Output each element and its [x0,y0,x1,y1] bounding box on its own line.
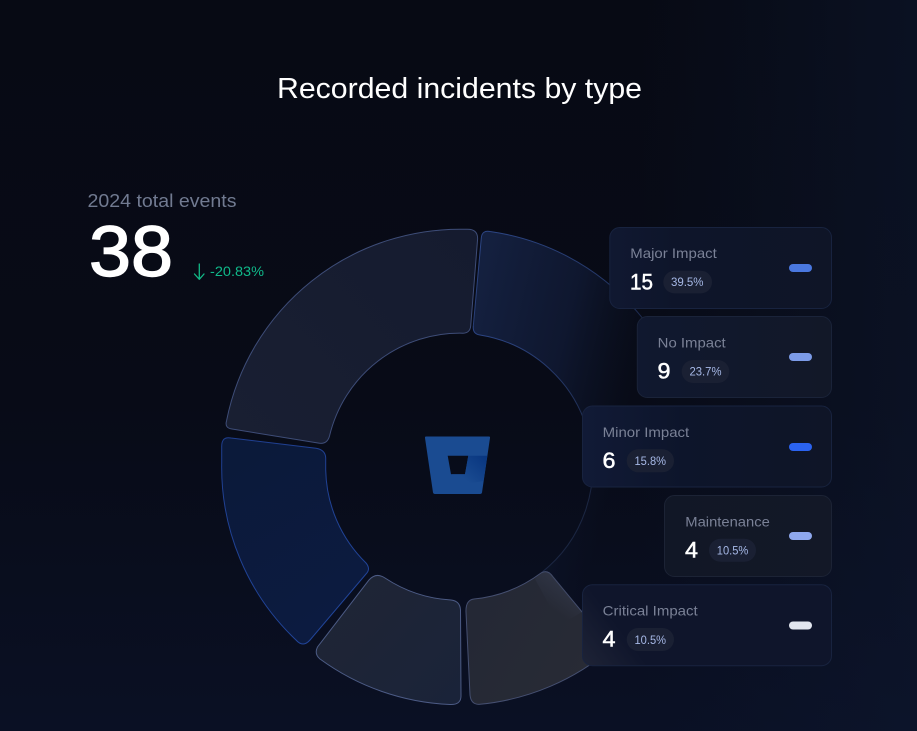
icon: bucket logo [425,436,490,494]
total events summary [88,191,264,292]
title: Recorded incidents by type [277,73,642,105]
label: Major Impact [630,245,717,261]
percentage pill: 23.7% [690,364,722,378]
value: 4 [602,627,616,652]
slice: major impact [473,231,695,648]
slice: critical impact [466,572,612,704]
total events value: 38 [89,213,173,292]
percentage pill [627,449,674,472]
percentage pill: 10.5% [717,544,749,558]
percentage pill [663,271,712,293]
value: 9 [658,358,670,384]
colour indicator [789,532,812,540]
slice: no impact [226,229,478,443]
percentage pill: 39.5% [671,275,704,289]
colour indicator [789,443,812,451]
colour indicator [789,622,812,630]
label: No Impact [658,334,726,350]
percentage pill [709,539,756,562]
percentage pill: 10.5% [634,633,666,647]
percentage pill [627,628,674,651]
percentage pill [682,360,729,383]
slice: minor impact [222,438,368,644]
donut chart [222,229,695,705]
icon: down arrow [194,264,204,279]
percentage pill: 15.8% [634,454,666,468]
legend card: minor impact [582,406,832,487]
slice: maintenance [316,575,461,705]
colour indicator [789,264,812,272]
value: 4 [685,538,698,562]
change percentage: -20.83% [210,263,264,279]
label: Critical Impact [603,603,698,619]
slice: critical overlap highlight [535,572,582,625]
label: Maintenance [685,514,770,530]
colour indicator [789,353,812,361]
total events label: 2024 total events [88,191,236,211]
legend card: no impact [637,316,832,398]
legend card: major impact [610,228,832,308]
value: 15 [630,270,653,294]
label: Minor Impact [603,424,689,440]
legend card: maintenance [664,496,832,576]
value: 6 [602,448,616,473]
legend card: critical impact [582,585,832,666]
